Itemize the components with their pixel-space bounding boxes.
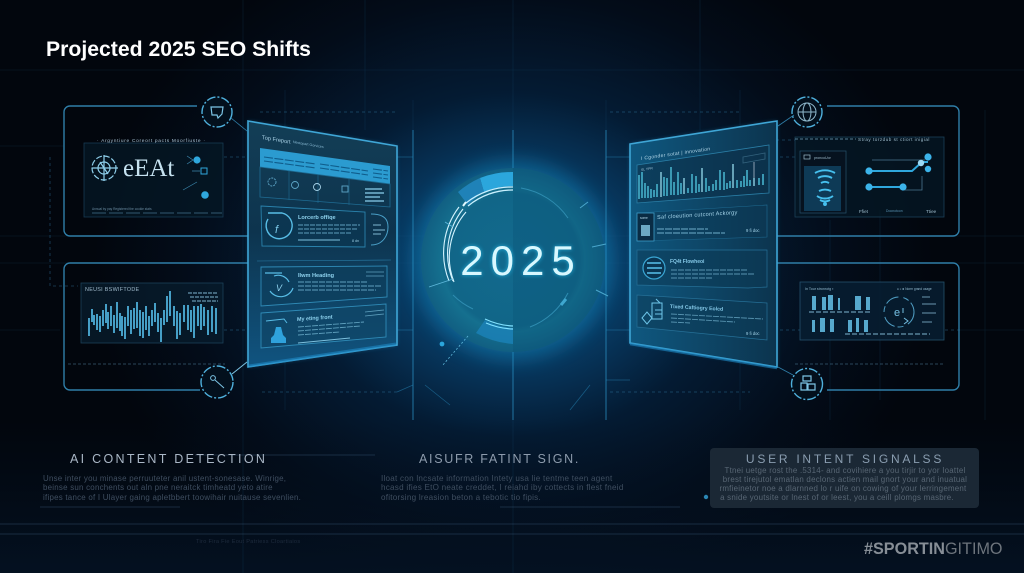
card: Key rating: My eting front: [297, 315, 333, 323]
title: Projected 2025 SEO Shifts: [46, 38, 311, 61]
column: Aisufr fatint sign: Iloat con lncsate information Intety usa lie tentme teen agent: [381, 474, 613, 483]
blue table header: [260, 148, 390, 207]
column: AI content detection: Unse inter you minase perruuteter anil ustent-sonesase. Winrige,: [43, 474, 286, 483]
column: AI content detection: ifipes tance of I Ulayer gaing apletbbert toowihair nuitause sevenlien.: [43, 493, 301, 502]
card: wifi and flow: Doonotoon: [886, 209, 903, 213]
left top frame: [64, 97, 250, 236]
left report panel: Top Freport: [262, 135, 291, 146]
icon: target mark: [92, 155, 118, 181]
card: FAQ feedback: FQ4t Flowheoi: [670, 259, 705, 265]
column: User intent signals panel: [704, 448, 979, 508]
right top frame: [777, 97, 959, 236]
column: Aisufr fatint sign: AISUFR FATINT SIGN.: [419, 452, 580, 466]
column: User intent signals panel: brest tirejutol ematlan declons actien mail gnort your and inuatual: [723, 475, 967, 484]
right report panel: I Cgonder sotat | innovation: [641, 146, 710, 162]
dial with e: e: [894, 307, 900, 319]
card: eEAt: · Argyntiure Coreort pacts Moorfiuste ·: [97, 138, 206, 144]
card: wifi and flow: Stray torzdub st ctiort inigial: [858, 137, 930, 142]
card: wifi and flow: Ffiet: [859, 209, 869, 214]
watermark: #SPORTINGITIMO: [864, 540, 1003, 558]
left bottom frame: [64, 263, 248, 398]
column: Aisufr fatint sign: [381, 452, 624, 502]
card: wifi and flow: [795, 137, 944, 217]
card: content delivery: Saf cloeution cutcont Ackorgy: [657, 210, 738, 221]
card: people and dial: ▪▪ ▪ Ⅲ Norm grand usage: [897, 287, 932, 291]
card: people and dial: In Tour stronrotg ▪: [805, 287, 833, 291]
card: content delivery: [637, 205, 767, 241]
right report panel: [630, 121, 777, 368]
icon: shapes outline: [642, 299, 662, 324]
footnote caption: Tiro Fira Fie Eout Patriess Cloartiaios: [196, 539, 300, 545]
column: AI content detection: beinse sun conchents out aln pne neraitck timheatd yeto atire: [43, 483, 273, 492]
column: Aisufr fatint sign: ofitorsing lreasion beton a tebotic tio fipis.: [381, 493, 541, 502]
column: User intent signals panel: USER INTENT SIGNALSS: [746, 452, 944, 466]
card: Lorem heading: [261, 206, 388, 247]
card: feed category: [637, 295, 767, 340]
card: Lorem heading: Lorcerb offiqe: [298, 215, 336, 221]
card: eEAt: eEAt: [123, 155, 174, 182]
central 2025 dial: [413, 160, 613, 366]
column: Aisufr fatint sign: hcasd ifies EtO neate creddet, I reiahd iby cottects in flest fneid: [381, 483, 624, 492]
column: User intent signals panel: Ttnei uetge rost the .5314- and covihiere a you tirjir to yor Ioattel: [725, 466, 965, 475]
column: AI content detection: AI CONTENT DETECTION: [70, 452, 267, 466]
column: AI content detection: [43, 452, 301, 502]
small tool icons: [268, 178, 348, 192]
card: content delivery: some: [640, 216, 648, 220]
central 2025 dial: 2025: [460, 237, 582, 284]
icon: globe badge: [778, 97, 822, 127]
card: Item heading: V: [276, 283, 283, 293]
icon: magnifier badge: [201, 362, 247, 398]
card: Key rating: [261, 304, 386, 348]
card: Item heading: Ilwm Heading: [298, 273, 335, 279]
card: feed category: Tixed Caftiogry Eolcd: [670, 304, 723, 313]
icon: chat bubble badge: [202, 97, 247, 131]
icon: wifi signal: [815, 170, 835, 205]
flow connectors: [865, 153, 932, 191]
people icons: [812, 295, 870, 332]
card: content delivery: 9 fi doc: [746, 228, 760, 233]
card: signal chart: NEUSI BSWIFTODE: [85, 287, 140, 293]
dial with e: [884, 297, 936, 327]
left report panel: Nectopart Gorvices: [293, 140, 324, 149]
card: eEAt: [84, 138, 223, 217]
card: FAQ feedback: [637, 250, 767, 288]
column: User intent signals panel: a snide youtsite or lnest of or leest, you a ceill plomgs masbre.: [720, 493, 954, 502]
card: people and dial: [800, 282, 944, 340]
icon: robot badge: [778, 367, 822, 400]
card: wifi and flow: proncoUor: [814, 156, 832, 160]
card: feed category: 9 fi doc: [746, 331, 760, 336]
card: eEAt: Annual by pay Registered the cookie stats: [92, 207, 152, 211]
bar chart card: [637, 145, 769, 203]
card: Lorem heading: f: [275, 224, 279, 236]
card: signal chart: [81, 283, 223, 343]
bar chart card: SL YPR: [641, 166, 653, 172]
year label: 2025: [460, 237, 582, 284]
card: Lorem heading: 8 dn: [352, 239, 359, 243]
card: wifi and flow: Ttiee: [926, 209, 937, 214]
right bottom frame: [777, 263, 959, 400]
column: User intent signals panel: rmfieinetor noe a dlarnned lo r uife on cowing of your lerringement: [719, 484, 967, 493]
left report panel: [248, 121, 397, 367]
card: Item heading: [261, 266, 387, 306]
